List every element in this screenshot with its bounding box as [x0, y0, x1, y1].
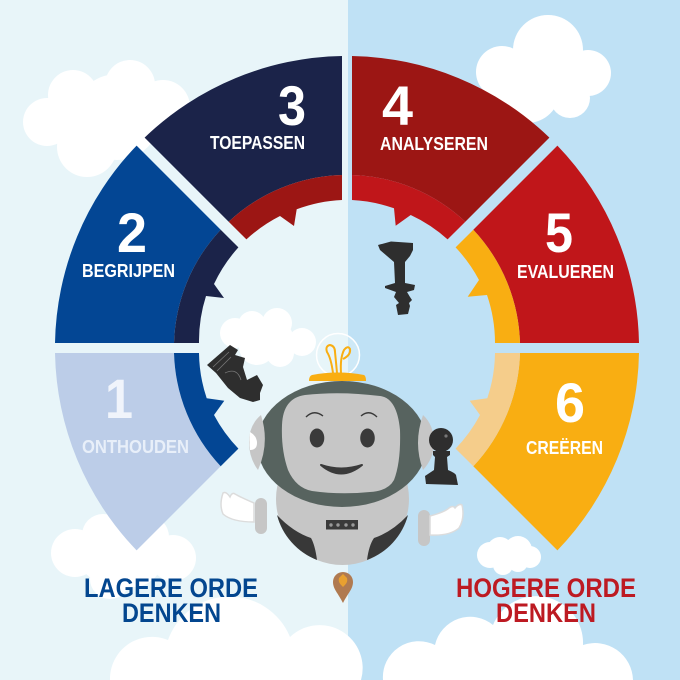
segment 3: toepassen — [145, 56, 342, 239]
icon: falling rook piece — [378, 242, 415, 315]
cloud: lower left small — [51, 514, 196, 599]
number 4: 4 — [382, 74, 413, 137]
robot eyes and brows — [306, 413, 377, 448]
cloud: lower right small — [477, 536, 541, 575]
label begrijpen: BEGRIJPEN — [82, 261, 175, 281]
heading: lagere orde denken: DENKEN — [122, 598, 221, 628]
robot control panel — [326, 520, 358, 530]
heading: lagere orde denken: LAGERE ORDE — [84, 573, 258, 603]
heading: hogere orde denken — [456, 573, 636, 628]
robot light bulb — [309, 334, 366, 381]
robot right arm — [418, 504, 463, 546]
number 3: 3 — [278, 74, 306, 137]
robot flame — [333, 572, 353, 603]
segment 2: begrijpen — [55, 146, 238, 343]
robot head — [249, 381, 434, 507]
cloud: top left — [23, 60, 190, 177]
icon: broken chess piece — [207, 345, 263, 402]
segment 6: creeren — [456, 353, 639, 550]
label evalueren: EVALUEREN — [517, 262, 614, 282]
number 5: 5 — [545, 201, 573, 264]
segment 5: evalueren — [456, 146, 639, 343]
label creeren: CREËREN — [526, 438, 603, 458]
heading: lagere orde denken — [84, 573, 258, 628]
robot left arm — [221, 492, 267, 534]
cloud: behind robot — [220, 308, 316, 367]
cloud: bottom left large — [110, 596, 363, 680]
background: lower order side — [0, 0, 348, 680]
cloud: bottom right large — [383, 596, 633, 680]
cloud: top right — [476, 15, 611, 123]
segment 1: onthouden — [55, 353, 238, 550]
segment 4: analyseren — [352, 56, 549, 239]
label analyseren: ANALYSEREN — [380, 134, 488, 154]
robot face — [282, 393, 400, 493]
robot — [221, 334, 463, 603]
background: higher order side — [348, 0, 680, 680]
number 2: 2 — [117, 201, 147, 264]
number 6: 6 — [555, 371, 585, 434]
heading: hogere orde denken: DENKEN — [496, 598, 596, 628]
robot body — [276, 433, 409, 565]
number 1: 1 — [105, 367, 133, 430]
icon: pawn in robot hand — [425, 428, 458, 485]
robot smile — [321, 465, 362, 474]
label onthouden: ONTHOUDEN — [82, 437, 189, 457]
label toepassen: TOEPASSEN — [210, 133, 305, 153]
heading: hogere orde denken: HOGERE ORDE — [456, 573, 636, 603]
